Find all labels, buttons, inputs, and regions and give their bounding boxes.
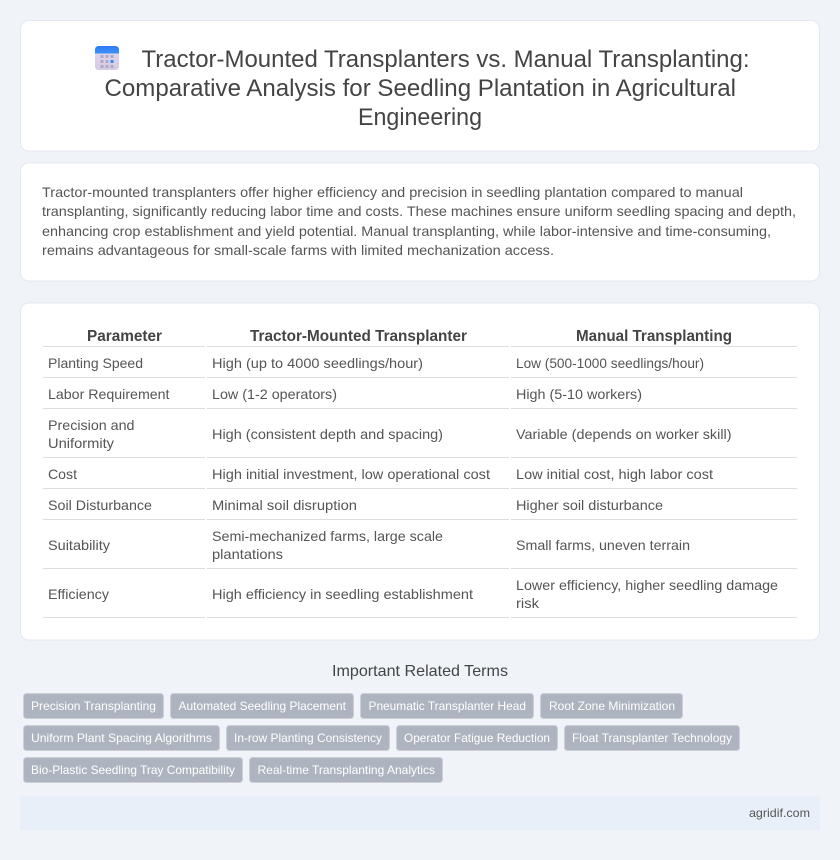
tag xyxy=(226,726,390,750)
row: precision and uniformity xyxy=(48,417,732,451)
row: efficiency: risk xyxy=(516,595,540,611)
summary text: remains advantageous for small-scale farms with limited mechanization access. xyxy=(42,242,554,258)
tag: Precision Transplanting xyxy=(31,699,156,713)
row: planting speed xyxy=(48,355,704,371)
row: cost: Low initial cost, high labor cost xyxy=(516,466,713,482)
title text: Engineering xyxy=(358,104,482,131)
tag xyxy=(250,758,442,782)
row: soil disturbance: Minimal soil disruption xyxy=(212,497,357,513)
tag xyxy=(396,726,558,750)
summary text: enhancing crop establishment and yield potential. Manual transplanting, while labor-intensive and time-consuming, xyxy=(42,223,771,239)
related term tags xyxy=(24,694,740,782)
tag: In-row Planting Consistency xyxy=(234,731,382,745)
row: labor requirement: High (5-10 workers) xyxy=(516,386,642,402)
row: suitability: Suitability xyxy=(48,537,110,553)
row: efficiency: Efficiency xyxy=(48,586,109,602)
row: precision and uniformity: Precision and xyxy=(48,417,134,433)
row: planting speed: Low (500-1000 seedlings/hour) xyxy=(516,355,704,371)
row: planting speed: Planting Speed xyxy=(48,355,143,371)
tag: Pneumatic Transplanter Head xyxy=(368,699,526,713)
icon: calendar xyxy=(95,46,119,70)
tag: Root Zone Minimization xyxy=(549,699,675,713)
table header: Parameter xyxy=(87,328,162,345)
footer: agridif.com xyxy=(749,806,810,820)
title text: Tractor-Mounted Transplanters vs. Manual Transplanting: xyxy=(142,46,750,73)
tag: Float Transplanter Technology xyxy=(572,731,732,745)
summary text: Tractor-mounted transplanters offer higher efficiency and precision in seedling plantation compared to manual xyxy=(42,184,743,200)
tag xyxy=(540,694,682,718)
row: precision and uniformity: Uniformity xyxy=(48,435,114,451)
footer xyxy=(20,796,820,830)
row: labor requirement: Low (1-2 operators) xyxy=(212,386,337,402)
tag xyxy=(24,758,242,782)
tag: Bio-Plastic Seedling Tray Compatibility xyxy=(31,763,235,777)
row: efficiency: Lower efficiency, higher seedling damage xyxy=(516,577,778,593)
tag: Real-time Transplanting Analytics xyxy=(258,763,435,777)
row: precision and uniformity: High (consistent depth and spacing) xyxy=(212,426,443,442)
row: cost: High initial investment, low operational cost xyxy=(212,466,490,482)
row: efficiency: High efficiency in seedling establishment xyxy=(212,586,473,602)
row: soil disturbance: Higher soil disturbance xyxy=(516,497,663,513)
row: labor requirement: Labor Requirement xyxy=(48,386,170,402)
heading: related terms: Important Related Terms xyxy=(332,663,508,680)
table header: Manual Transplanting xyxy=(576,328,732,345)
row: precision and uniformity: Variable (depends on worker skill) xyxy=(516,426,732,442)
tag: Operator Fatigue Reduction xyxy=(404,731,550,745)
row: suitability: plantations xyxy=(212,546,283,562)
panel: summary xyxy=(20,163,820,281)
tag xyxy=(170,694,354,718)
panel: title xyxy=(20,20,820,151)
row: suitability: Semi-mechanized farms, large scale xyxy=(212,528,443,544)
title text xyxy=(104,46,750,131)
panel: comparison table xyxy=(20,303,820,640)
tag xyxy=(360,694,534,718)
tag xyxy=(564,726,740,750)
summary text xyxy=(42,184,796,258)
row: labor requirement xyxy=(48,386,642,402)
title text: Comparative Analysis for Seedling Plantation in Agricultural xyxy=(104,75,736,102)
row: suitability xyxy=(48,528,690,562)
tag xyxy=(24,726,220,750)
tag: Automated Seedling Placement xyxy=(178,699,347,713)
row: soil disturbance xyxy=(48,497,663,513)
tag: Uniform Plant Spacing Algorithms xyxy=(31,731,212,745)
row: efficiency xyxy=(48,577,778,611)
row: planting speed: High (up to 4000 seedlings/hour) xyxy=(212,355,423,371)
table header: Tractor-Mounted Transplanter xyxy=(250,328,467,345)
summary text: transplanting, significantly reducing labor time and costs. These machines ensure uniform seedling spacing and depth, xyxy=(42,203,796,219)
row: suitability: Small farms, uneven terrain xyxy=(516,537,690,553)
row: cost: Cost xyxy=(48,466,77,482)
row: cost xyxy=(48,466,713,482)
row: soil disturbance: Soil Disturbance xyxy=(48,497,152,513)
table header xyxy=(87,328,732,345)
tag xyxy=(24,694,164,718)
